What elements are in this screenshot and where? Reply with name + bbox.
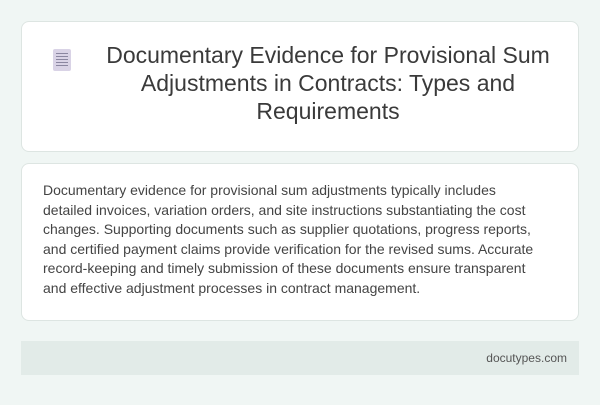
footer text: docutypes.com: [486, 351, 567, 365]
panel: description: [21, 163, 579, 321]
panel: header: [21, 21, 579, 152]
text block: Documentary evidence for provisional sum adjustments typically includes detailed invoices, variation orders, and site instructions substantiating the cost changes. Supporting documents such as supplier quotations, progress reports, and certified payment claims provide verification for the revised sums. Accurate record-keeping and timely submission of these documents ensure transparent and effective adjustment processes in contract management.: [43, 182, 533, 296]
title: Documentary Evidence for Provisional Sum Adjustments in Contracts: Types and Requirements: [106, 42, 550, 124]
footer: [21, 341, 579, 375]
icon: document: [53, 49, 71, 71]
